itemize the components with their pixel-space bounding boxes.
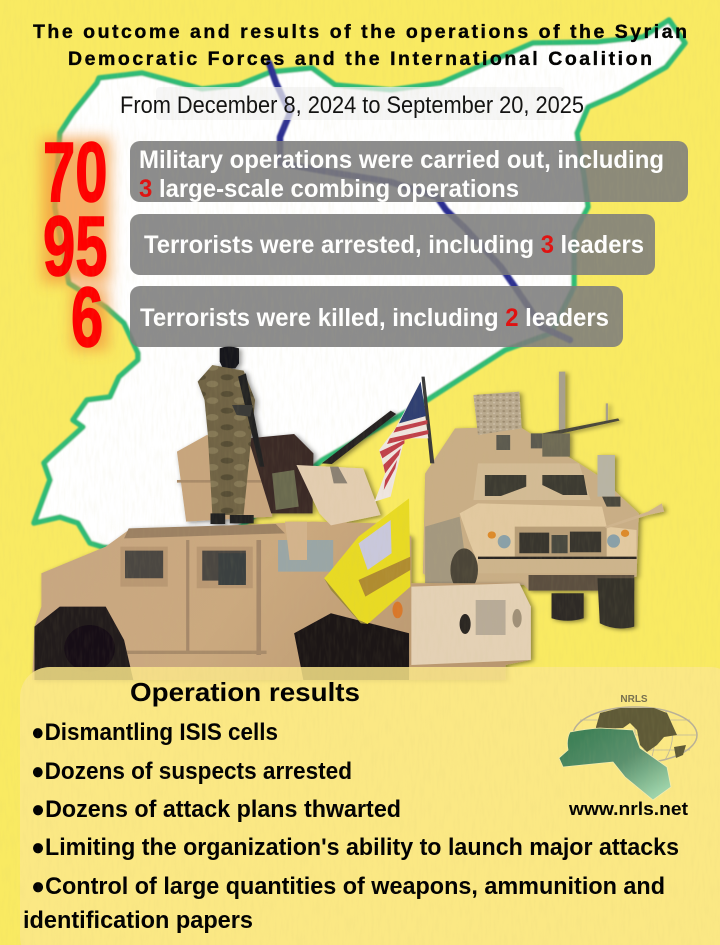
results list: ●Limiting the organization's ability to launch major attacks [31, 834, 679, 861]
big numbers: 95 [43, 201, 107, 294]
big numbers: 70 [43, 127, 107, 220]
big numbers: 6 [71, 272, 103, 365]
panel: stat 70: 3 large-scale combing operations [139, 175, 519, 203]
panel: stat 70: Military operations were carried out, including [139, 146, 664, 174]
NRLS logo [559, 694, 697, 819]
military vehicles [32, 347, 664, 680]
vehicle: MRAP [423, 372, 664, 629]
panel: stat 70 [130, 141, 688, 203]
results list: ●Control of large quantities of weapons, ammunition and [31, 873, 665, 900]
website: www.nrls.net [568, 799, 688, 819]
panel: stat 95 [130, 214, 655, 275]
results list: ●Dismantling ISIS cells [31, 719, 278, 746]
flag: USA [375, 377, 434, 502]
NRLS label: NRLS [620, 694, 648, 705]
results list: ●Dozens of attack plans thwarted [31, 796, 401, 823]
panel: stat 6 [130, 286, 623, 347]
heading: Operation results [130, 677, 360, 707]
results list: identification papers [23, 907, 253, 934]
results list [23, 719, 679, 934]
river [269, 63, 570, 340]
title [33, 21, 687, 70]
soldier [220, 347, 239, 368]
number glows [42, 138, 110, 350]
title: The outcome and results of the operations of the Syrian [33, 21, 687, 43]
vehicle: humvee with gunner [32, 347, 531, 680]
flag: SDF [324, 498, 410, 624]
panel: stat 95: Terrorists were arrested, including 3 leaders [144, 231, 644, 259]
date band [156, 87, 564, 120]
globe [573, 707, 697, 763]
date range: From December 8, 2024 to September 20, 2025 [120, 92, 584, 119]
results list: ●Dozens of suspects arrested [31, 758, 352, 785]
title: Democratic Forces and the International Coalition [68, 48, 652, 70]
big numbers [43, 127, 107, 365]
Kurdistan region [559, 728, 671, 800]
panel: operation results [20, 667, 720, 945]
panel: stat 6: Terrorists were killed, including 2 leaders [140, 304, 609, 332]
map of Syria [34, 20, 685, 560]
